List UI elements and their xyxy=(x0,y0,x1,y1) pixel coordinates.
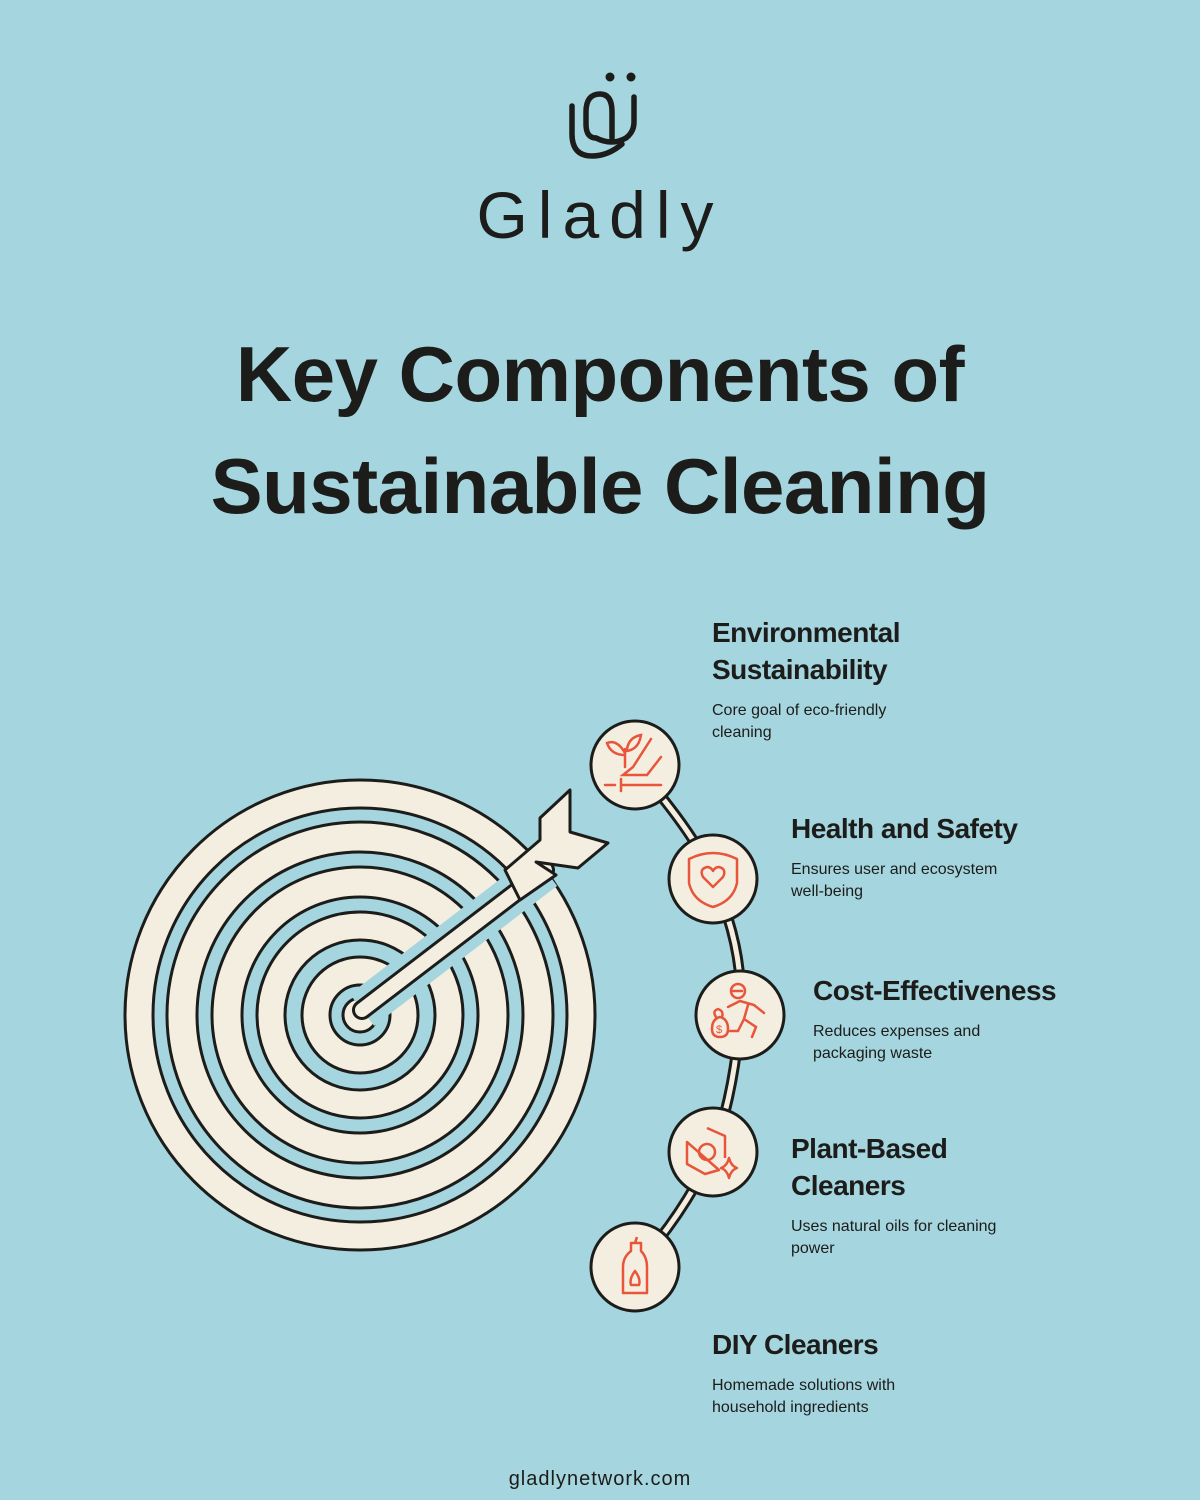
title xyxy=(211,330,989,530)
item: Environmental Sustainability xyxy=(712,617,900,741)
item: Environmental Sustainability: Core goal of eco-friendly xyxy=(712,702,886,719)
item: Health and Safety xyxy=(791,813,1018,900)
icon: hexagon sparkle xyxy=(668,1106,758,1198)
target with arrow xyxy=(124,778,610,1252)
item: Health and Safety: Ensures user and ecosystem xyxy=(791,861,997,878)
icon: money running xyxy=(694,970,786,1060)
item: DIY Cleaners: household ingredients xyxy=(712,1399,869,1416)
item: Health and Safety: Health and Safety xyxy=(791,813,1017,844)
item: Health and Safety: well-being xyxy=(791,883,863,900)
item: Cost-Effectiveness: packaging waste xyxy=(813,1045,932,1062)
item: Cost-Effectiveness: Cost-Effectiveness xyxy=(813,975,1056,1006)
icon: plant in hand xyxy=(590,720,680,810)
item: Plant-Based Cleaners: Cleaners xyxy=(791,1170,905,1201)
icon: shield heart xyxy=(668,834,758,924)
item: Environmental Sustainability: Environmental xyxy=(712,617,900,648)
item: Cost-Effectiveness xyxy=(813,975,1056,1062)
item: Plant-Based Cleaners xyxy=(791,1133,996,1257)
title: Key Components of xyxy=(236,330,964,418)
title: Sustainable Cleaning xyxy=(211,442,989,530)
icon: money running: $ xyxy=(716,1024,722,1036)
item: Environmental Sustainability: Sustainability xyxy=(712,654,887,685)
item: Plant-Based Cleaners: Uses natural oils for cleaning xyxy=(791,1218,996,1235)
item: Plant-Based Cleaners: Plant-Based xyxy=(791,1133,947,1164)
item: Plant-Based Cleaners: power xyxy=(791,1240,835,1257)
logo wordmark: Gladly xyxy=(476,178,724,252)
item: Environmental Sustainability: cleaning xyxy=(712,724,772,741)
item: Cost-Effectiveness: Reduces expenses and xyxy=(813,1023,980,1040)
item: DIY Cleaners: Homemade solutions with xyxy=(712,1377,895,1394)
logo icon xyxy=(569,72,637,159)
footer url: gladlynetwork.com xyxy=(509,1468,691,1490)
item: DIY Cleaners: DIY Cleaners xyxy=(712,1329,878,1360)
item: DIY Cleaners xyxy=(712,1329,895,1416)
icon: bottle xyxy=(590,1222,680,1312)
